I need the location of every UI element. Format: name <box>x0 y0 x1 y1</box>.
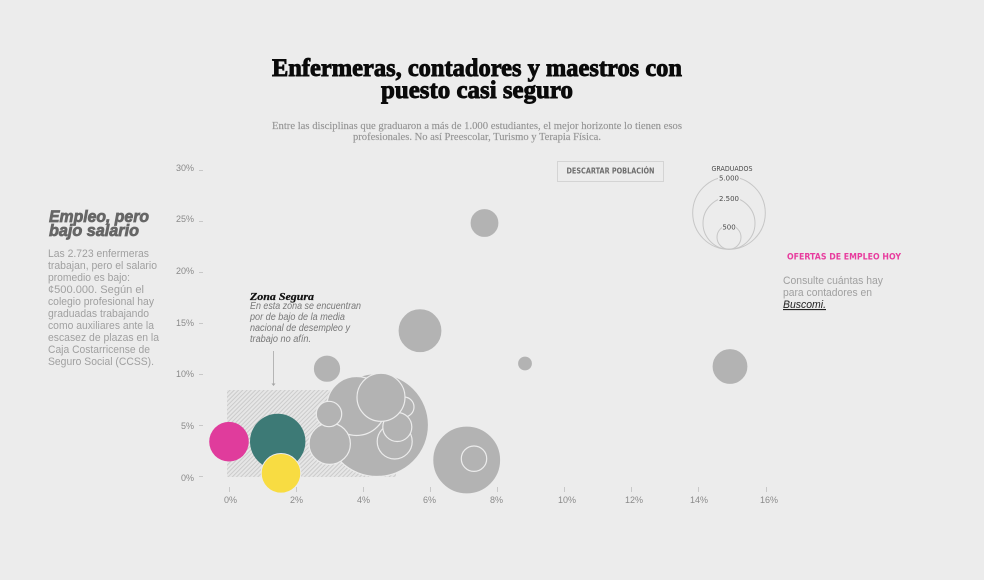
bubble: magenta highlight <box>209 422 249 462</box>
left panel body text: trabajan, pero el salario <box>48 260 157 272</box>
left text panel: empleo, pero bajo salario <box>48 208 160 368</box>
x axis: 12% <box>625 495 643 505</box>
left panel body text: Caja Costarricense de <box>48 344 150 356</box>
title <box>272 55 682 104</box>
left panel body text: como auxiliares ante la <box>48 320 155 332</box>
x axis <box>224 487 778 505</box>
job offers text <box>783 275 883 311</box>
left panel body text: promedio es bajo: <box>48 272 130 284</box>
size legend: graduados <box>693 165 765 249</box>
y axis: 20% <box>176 266 194 276</box>
left panel body text: Las 2.723 enfermeras <box>48 248 149 260</box>
job offers text: para contadores en <box>783 287 872 299</box>
subtitle <box>272 121 682 143</box>
left panel heading: Empleo, pero <box>49 208 149 226</box>
y axis: 5% <box>181 421 194 431</box>
job offers text: Buscomi. <box>783 299 826 311</box>
bubble: yellow highlight <box>261 454 301 493</box>
job offers heading: OFERTAS DE EMPLEO HOY <box>787 252 902 262</box>
x axis: 4% <box>357 495 370 505</box>
title: Enfermeras, contadores y maestros con <box>272 55 682 82</box>
arrow to safe zone <box>272 351 276 386</box>
y axis: 30% <box>176 163 194 173</box>
x axis: 8% <box>490 495 503 505</box>
size legend: graduados: 2.500 <box>719 195 739 203</box>
x axis: 10% <box>558 495 576 505</box>
left panel body text: colegio profesional hay <box>48 296 154 308</box>
size legend: graduados: 5.000 <box>719 174 739 182</box>
left panel body text <box>48 248 160 368</box>
y axis <box>176 163 203 483</box>
safe zone annotation: En esta zona se encuentran <box>250 301 361 312</box>
x axis: 14% <box>690 495 708 505</box>
y axis: 15% <box>176 318 194 328</box>
safe zone annotation: nacional de desempleo y <box>250 323 351 334</box>
x axis: 16% <box>760 495 778 505</box>
subtitle: Entre las disciplinas que graduaron a más de 1.000 estudiantes, el mejor horizonte lo tienen esos <box>272 121 682 132</box>
bubbles: gray disciplines <box>309 208 748 494</box>
x axis: 6% <box>423 495 436 505</box>
left panel body text: graduadas trabajando <box>48 308 149 320</box>
left panel heading <box>49 208 149 240</box>
button: descartar poblacion <box>558 162 664 182</box>
y axis: 10% <box>176 369 194 379</box>
y axis: 0% <box>181 473 194 483</box>
left panel body text: ¢500.000. Según el <box>48 284 144 296</box>
left panel heading: bajo salario <box>49 222 139 240</box>
safe zone hatched area <box>227 390 396 477</box>
size legend: graduados: 500 <box>722 224 736 232</box>
safe zone annotation: trabajo no afín. <box>250 334 311 345</box>
left panel body text: escasez de plazas en la <box>48 332 160 344</box>
subtitle: profesionales. No así Preescolar, Turismo y Terapia Física. <box>353 132 601 143</box>
safe zone annotation: Zona Segura <box>249 292 314 303</box>
job offers text: Consulte cuántas hay <box>783 275 883 287</box>
button: descartar poblacion: DESCARTAR POBLACIÓN <box>566 166 654 176</box>
title: puesto casi seguro <box>381 77 573 104</box>
y axis: 25% <box>176 214 194 224</box>
bubble: teal highlight <box>250 414 305 469</box>
x axis: 2% <box>290 495 303 505</box>
x axis: 0% <box>224 495 237 505</box>
safe zone annotation <box>249 292 361 345</box>
size legend: graduados: GRADUADOS <box>712 165 753 173</box>
safe zone annotation: por de bajo de la media <box>249 312 345 323</box>
left panel body text: Seguro Social (CCSS). <box>48 356 154 368</box>
